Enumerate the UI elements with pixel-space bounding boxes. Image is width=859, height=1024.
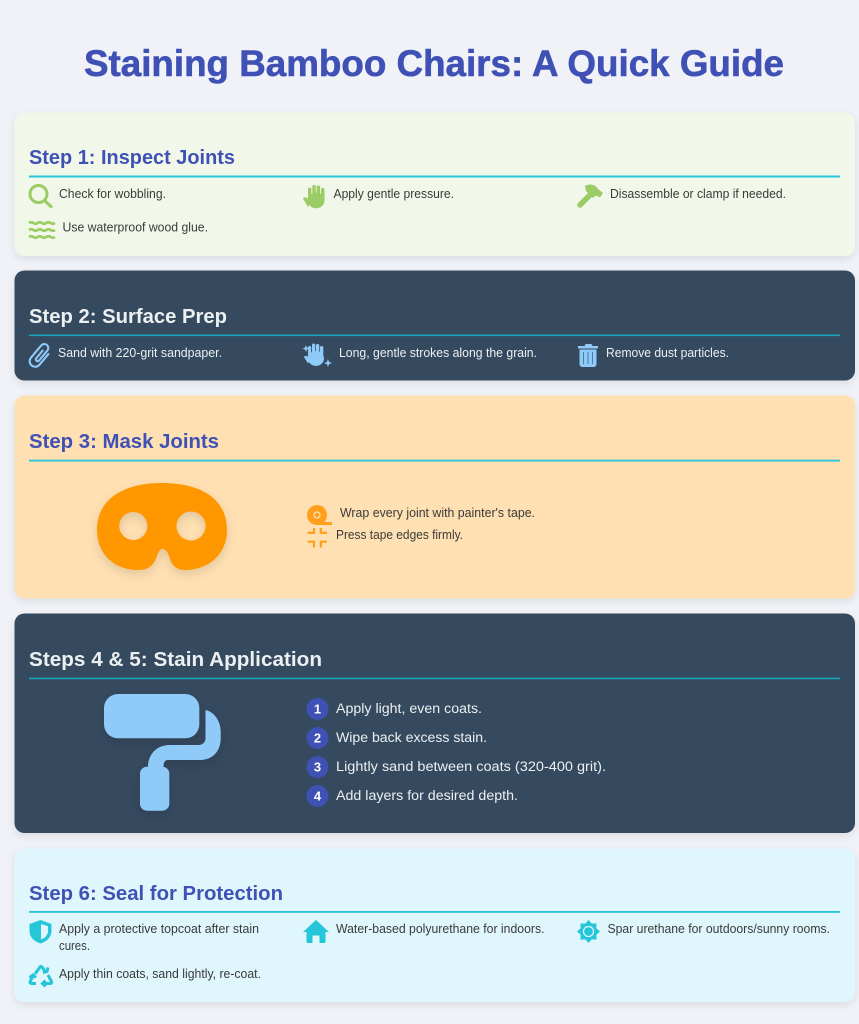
icon: hand xyxy=(303,185,325,208)
list item 1: 1 xyxy=(314,702,321,716)
icon: compress arrows xyxy=(308,528,327,548)
list item 3: 3 xyxy=(314,760,321,774)
text: water-based polyurethane: Water-based polyurethane for indoors. xyxy=(336,921,544,936)
panel: step 6 seal for protection xyxy=(14,848,855,1002)
list item 1: Apply light, even coats. xyxy=(336,701,482,716)
text block: protective topcoat: Apply a protective topcoat after stain xyxy=(59,921,259,936)
text: wrap every joint: Wrap every joint with painter's tape. xyxy=(340,505,535,520)
panel: step 3 mask joints xyxy=(14,396,855,598)
panel: step 1 inspect joints xyxy=(14,112,855,256)
list item 3: Lightly sand between coats (320-400 grit). xyxy=(336,759,606,774)
heading: step 1: Step 1: Inspect Joints xyxy=(29,146,235,169)
icon: tape roll xyxy=(307,505,332,525)
list item 4: Add layers for desired depth. xyxy=(336,788,518,803)
icon: hammer xyxy=(580,185,603,205)
text: press tape edges: Press tape edges firmly. xyxy=(336,527,463,542)
list item 4: 4 xyxy=(314,788,322,804)
title: Staining Bamboo Chairs: A Quick Guide xyxy=(84,43,784,84)
text: thin coats: Apply thin coats, sand lightly, re-coat. xyxy=(59,966,261,981)
icon: magnifying glass xyxy=(30,186,51,206)
icon: water waves xyxy=(29,222,55,238)
panel: steps 4 and 5 stain application xyxy=(14,614,855,833)
text: apply gentle pressure: Apply gentle pressure. xyxy=(334,186,454,201)
list item 2: Wipe back excess stain. xyxy=(336,730,487,745)
text: remove dust: Remove dust particles. xyxy=(606,345,729,360)
icon: recycle xyxy=(30,966,52,986)
text: long gentle strokes: Long, gentle strokes along the grain. xyxy=(339,345,537,360)
heading: steps 4 and 5: Steps 4 & 5: Stain Application xyxy=(29,648,322,671)
icon: sparkling hand xyxy=(302,344,332,367)
text: sand with sandpaper: Sand with 220-grit sandpaper. xyxy=(58,345,222,360)
icon: mask xyxy=(97,483,227,570)
heading: step 3: Step 3: Mask Joints xyxy=(29,430,219,453)
icon: paint roller xyxy=(104,694,221,811)
list item 2 xyxy=(306,727,487,749)
panel: step 2 surface prep xyxy=(14,270,855,380)
icon: house xyxy=(303,920,329,943)
icon: trash can xyxy=(578,344,598,367)
icon: shield xyxy=(30,920,52,944)
icon: sun xyxy=(577,920,600,943)
text: check for wobbling: Check for wobbling. xyxy=(59,186,166,201)
icon: paperclip xyxy=(27,342,52,369)
text: cures: cures. xyxy=(59,938,90,953)
text: disassemble or clamp: Disassemble or clamp if needed. xyxy=(610,186,786,201)
list item 4 xyxy=(306,785,518,807)
heading: step 6: Step 6: Seal for Protection xyxy=(29,882,283,905)
text: waterproof wood glue: Use waterproof wood glue. xyxy=(62,220,208,234)
list item 2: 2 xyxy=(314,730,321,746)
list item 1 xyxy=(306,698,482,720)
list item 3 xyxy=(306,756,606,778)
text: spar urethane: Spar urethane for outdoors/sunny rooms. xyxy=(608,921,830,936)
heading: step 2: Step 2: Surface Prep xyxy=(29,305,227,328)
